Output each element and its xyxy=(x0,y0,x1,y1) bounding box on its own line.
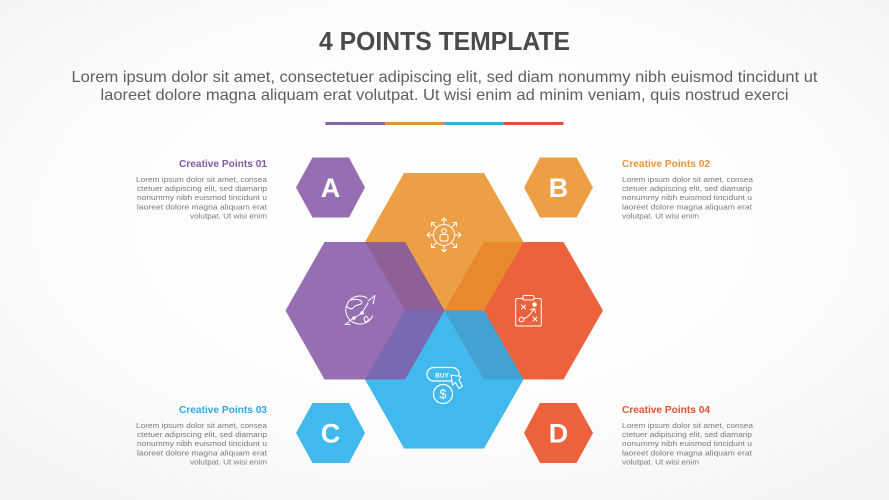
overlap: orange and red xyxy=(444,242,524,310)
subtitle: Lorem ipsum dolor sit amet, consectetuer adipiscing elit, sed diam nonummy nibh euismod tincidunt ut xyxy=(72,69,818,86)
overlap: blue and red xyxy=(444,310,524,380)
text block: point 02: Lorem ipsum dolor sit amet, consea xyxy=(622,175,754,184)
text block: point 01: Creative Points 01 xyxy=(179,158,267,170)
text block: point 04: volutpat. Ut wisi enim xyxy=(622,458,699,467)
icon: person with outward arrows xyxy=(427,218,461,252)
badge D: D xyxy=(549,418,568,448)
subtitle xyxy=(72,69,818,104)
text block: point 01: ctetuer adipiscing elit, sed diamarip xyxy=(137,184,267,193)
text block: point 03: laoreet dolore magna aliquam erat xyxy=(137,448,268,457)
badge A xyxy=(296,158,365,218)
text block: point 03 xyxy=(136,404,268,467)
text block: point 01 xyxy=(136,158,268,221)
text block: point 04: laoreet dolore magna aliquam erat xyxy=(622,448,753,457)
text block: point 01: volutpat. Ut wisi enim xyxy=(190,212,267,221)
icon: strategy clipboard xyxy=(516,296,541,326)
hexagon: blue xyxy=(365,310,524,448)
icon: buy button and dollar coin: BUY xyxy=(435,372,450,380)
overlap: purple and orange xyxy=(365,242,444,310)
badge A: A xyxy=(321,173,340,203)
badge B xyxy=(524,158,593,218)
badge C xyxy=(296,403,365,463)
text block: point 01: Lorem ipsum dolor sit amet, consea xyxy=(136,175,268,184)
title: 4 POINTS TEMPLATE xyxy=(319,26,570,56)
text block: point 03: nonummy nibh euismod tincidunt u xyxy=(137,439,267,448)
badge B: B xyxy=(549,173,568,203)
text block: point 03: Lorem ipsum dolor sit amet, consea xyxy=(136,421,268,430)
text block: point 02: volutpat. Ut wisi enim xyxy=(622,212,699,221)
icon: buy button and dollar coin xyxy=(427,368,462,404)
text block: point 02: Creative Points 02 xyxy=(622,158,710,170)
hexagon: orange xyxy=(365,173,524,310)
hexagon cluster xyxy=(286,173,603,448)
text block: point 02 xyxy=(622,158,754,221)
text block: point 02: nonummy nibh euismod tincidunt u xyxy=(622,193,752,202)
badge C: C xyxy=(321,418,340,448)
text block: point 01: laoreet dolore magna aliquam erat xyxy=(137,202,268,211)
hexagon: purple xyxy=(286,242,444,380)
hexagon: red xyxy=(444,242,603,380)
text block: point 04: Lorem ipsum dolor sit amet, consea xyxy=(622,421,754,430)
text block: point 04: nonummy nibh euismod tincidunt u xyxy=(622,439,752,448)
text block: point 03: ctetuer adipiscing elit, sed diamarip xyxy=(137,430,267,439)
text block: point 01: nonummy nibh euismod tincidunt u xyxy=(137,193,267,202)
text block: point 04: ctetuer adipiscing elit, sed diamarip xyxy=(622,430,752,439)
text block: point 03: volutpat. Ut wisi enim xyxy=(190,458,267,467)
subtitle: laoreet dolore magna aliquam erat volutpat. Ut wisi enim ad minim veniam, quis nostrud exerci xyxy=(100,87,788,104)
text block: point 04: Creative Points 04 xyxy=(622,404,710,416)
badge D xyxy=(524,403,593,463)
icon: buy button and dollar coin: $ xyxy=(440,388,447,402)
text block: point 03: Creative Points 03 xyxy=(179,404,267,416)
text block: point 02: ctetuer adipiscing elit, sed diamarip xyxy=(622,184,752,193)
icon: globe with plane path xyxy=(345,296,375,324)
text block: point 02: laoreet dolore magna aliquam erat xyxy=(622,202,753,211)
text block: point 04 xyxy=(622,404,754,467)
overlap: purple and blue xyxy=(365,310,444,380)
colour divider xyxy=(326,122,564,125)
